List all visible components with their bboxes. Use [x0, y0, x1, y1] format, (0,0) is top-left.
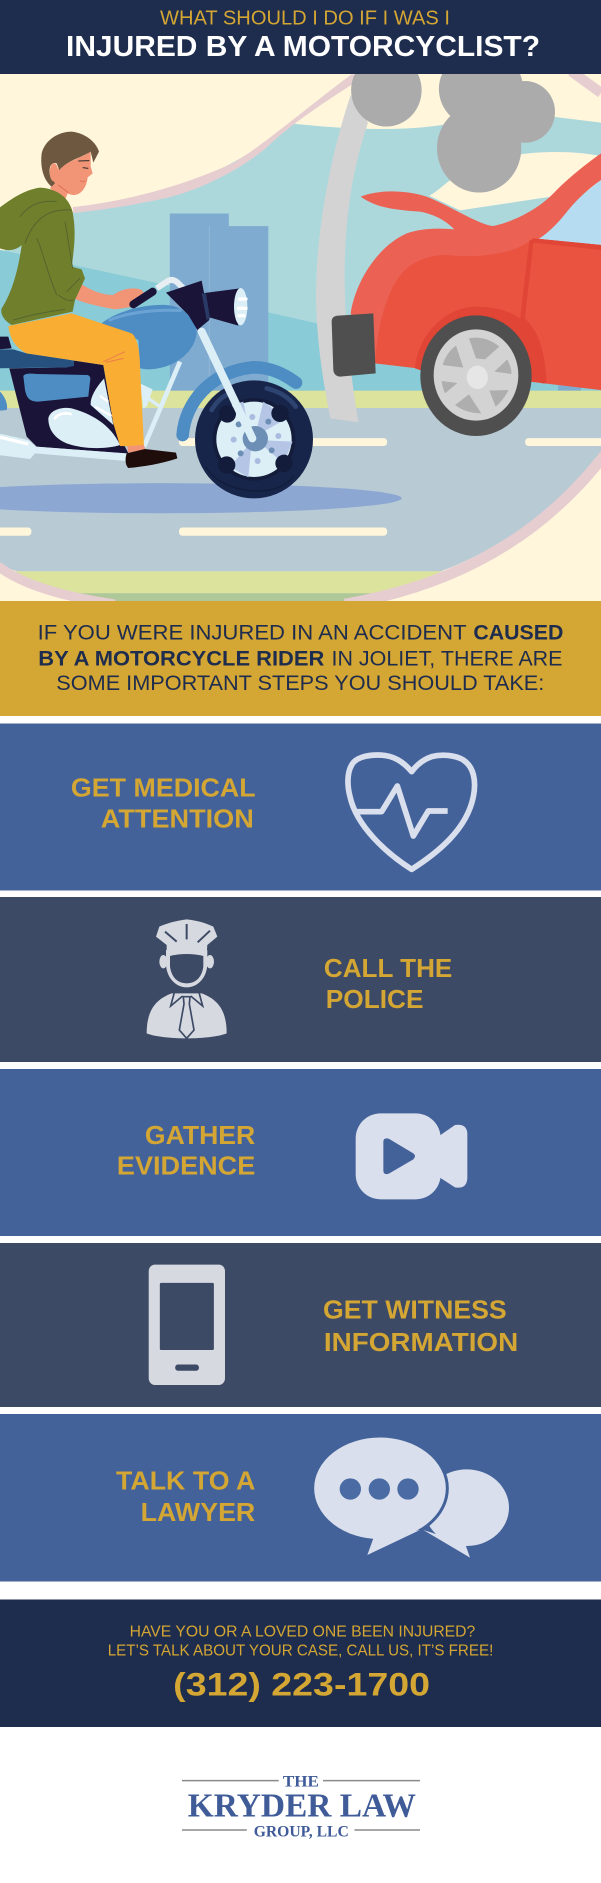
- phone number: (312) 223-1700: [173, 1667, 430, 1703]
- panel: get witness information: INFORMATION: [324, 1329, 518, 1357]
- panel: talk to a lawyer: TALK TO A: [116, 1468, 255, 1496]
- panel: talk to a lawyer: LAWYER: [141, 1499, 255, 1527]
- crashed red car: [332, 153, 601, 436]
- icon: heart with pulse: [348, 755, 475, 869]
- panel: call the police: POLICE: [326, 986, 424, 1014]
- panel: gather evidence: GATHER: [145, 1122, 255, 1150]
- intro panel: BY A MOTORCYCLE RIDER: [38, 647, 324, 670]
- main title: INJURED BY A MOTORCYCLIST?: [66, 31, 540, 63]
- panel: gather evidence: [0, 1069, 601, 1236]
- intro panel: [0, 601, 601, 716]
- intro panel: SOME IMPORTANT STEPS YOU SHOULD TAKE:: [56, 672, 544, 695]
- logo: the kryder law group: THE: [283, 1773, 319, 1790]
- rider: [0, 132, 177, 468]
- header kicker: WHAT SHOULD I DO IF I WAS I: [160, 8, 450, 30]
- utility pole: [316, 95, 368, 422]
- intro panel: IN JOLIET, THERE ARE: [332, 647, 562, 670]
- intro panel: IF YOU WERE INJURED IN AN ACCIDENT: [38, 622, 467, 645]
- motorcycle: [0, 280, 313, 498]
- smoke: [351, 49, 555, 193]
- panel: call the police: CALL THE: [324, 955, 452, 983]
- hero illustration: [0, 49, 601, 604]
- logo: the kryder law group: KRYDER LAW: [188, 1787, 416, 1824]
- icon: smartphone: [149, 1265, 225, 1385]
- road and grass: [0, 391, 601, 604]
- icon: video camera: [356, 1113, 467, 1199]
- background landscape: [0, 71, 601, 603]
- call to action footer: [0, 1600, 601, 1727]
- pink sweep curve: [73, 74, 362, 213]
- panel: get medical attention: GET MEDICAL: [71, 774, 256, 802]
- header banner: [0, 0, 601, 74]
- intro panel: CAUSED: [473, 622, 563, 645]
- icon: chat bubbles: [313, 1436, 509, 1558]
- call to action footer: HAVE YOU OR A LOVED ONE BEEN INJURED?: [130, 1624, 475, 1640]
- panel: get medical attention: [0, 724, 601, 890]
- panel: get medical attention: ATTENTION: [101, 806, 254, 834]
- panel: gather evidence: EVIDENCE: [117, 1153, 255, 1181]
- panel: talk to a lawyer: [0, 1414, 601, 1582]
- panel: call the police: [0, 897, 601, 1062]
- panel: get witness information: GET WITNESS: [323, 1297, 507, 1325]
- logo: the kryder law group: GROUP, LLC: [254, 1823, 349, 1840]
- logo: the kryder law group: [182, 1773, 420, 1840]
- icon: police officer: [147, 919, 227, 1038]
- call to action footer: LET’S TALK ABOUT YOUR CASE, CALL US, IT’S FREE!: [108, 1643, 493, 1660]
- panel: get witness information: [0, 1243, 601, 1407]
